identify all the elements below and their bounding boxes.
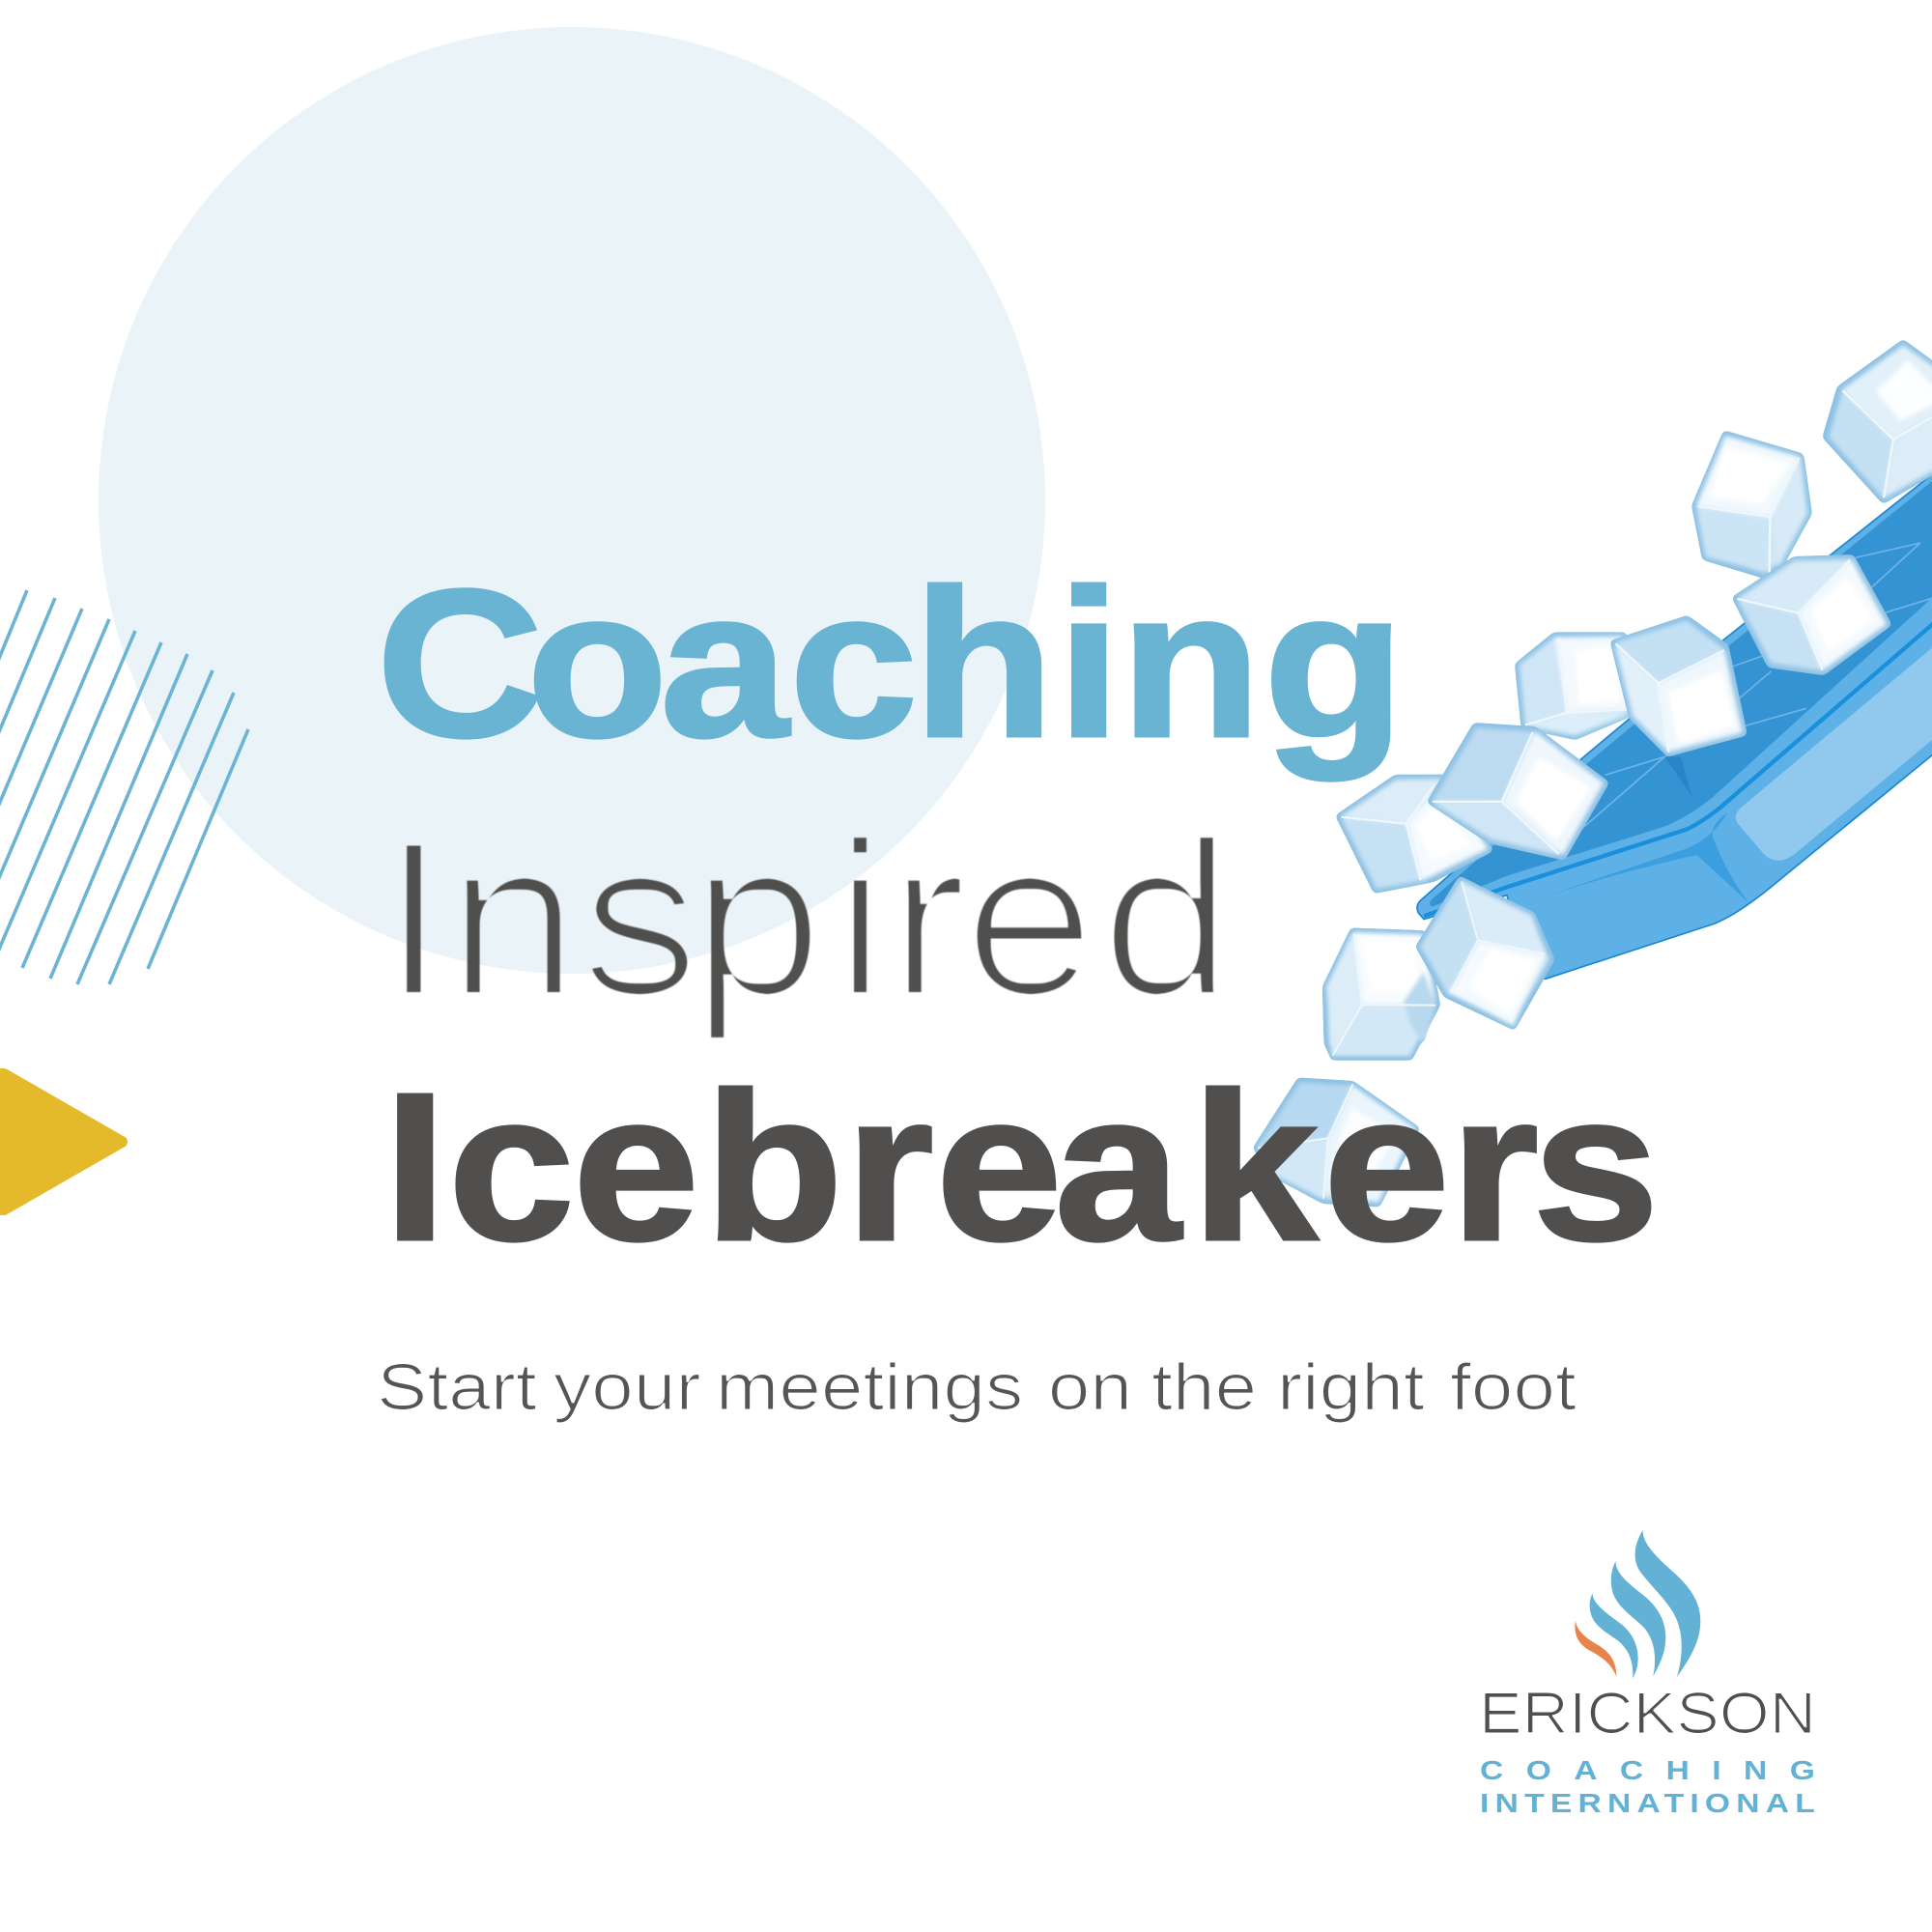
cube B	[1695, 434, 1808, 576]
striped circle decoration	[0, 590, 248, 984]
basin ridges	[1577, 543, 1932, 833]
tray basin	[1430, 461, 1932, 906]
ice cubes on the tray	[1339, 343, 1932, 891]
cube C	[1736, 557, 1888, 672]
logo flames	[1575, 1530, 1700, 1678]
title: Icebreakers: Icebreakers	[384, 1050, 1659, 1285]
tray crease	[1520, 813, 1749, 905]
cube E	[1613, 618, 1744, 753]
ice cube tray	[1417, 454, 1932, 979]
subtitle: on	[1048, 1350, 1132, 1424]
title: Coaching: Coaching	[376, 546, 1405, 781]
subtitle: right	[1277, 1350, 1425, 1424]
subtitle: the	[1151, 1350, 1257, 1424]
tray rim stripe	[1424, 603, 1932, 916]
pale blue circle	[99, 27, 1045, 974]
logo line: coaching: COACHING	[1480, 1755, 1815, 1785]
cube G	[1339, 778, 1490, 891]
tray body	[1417, 454, 1932, 979]
cube D	[1518, 636, 1632, 737]
tray side panel	[1736, 626, 1932, 861]
subtitle: foot	[1450, 1350, 1577, 1424]
subtitle: meetings	[716, 1350, 1023, 1424]
subtitle: Start	[377, 1350, 537, 1424]
subtitle: your	[554, 1350, 701, 1424]
cube I	[1325, 930, 1437, 1058]
yellow triangle	[0, 1074, 122, 1209]
ice cubes at tray tip	[1325, 879, 1552, 1058]
cube H	[1418, 879, 1552, 1027]
logo line: international: INTERNATIONAL	[1480, 1788, 1815, 1818]
title: Inspired: Inspired	[381, 797, 1234, 1041]
logo: Erickson Coaching International	[1479, 1530, 1816, 1818]
cube A	[1826, 343, 1932, 500]
cube F	[1431, 725, 1605, 857]
logo wordmark: ERICKSON	[1479, 1681, 1816, 1746]
ice cube behind Icebreakers text	[1256, 1080, 1417, 1205]
